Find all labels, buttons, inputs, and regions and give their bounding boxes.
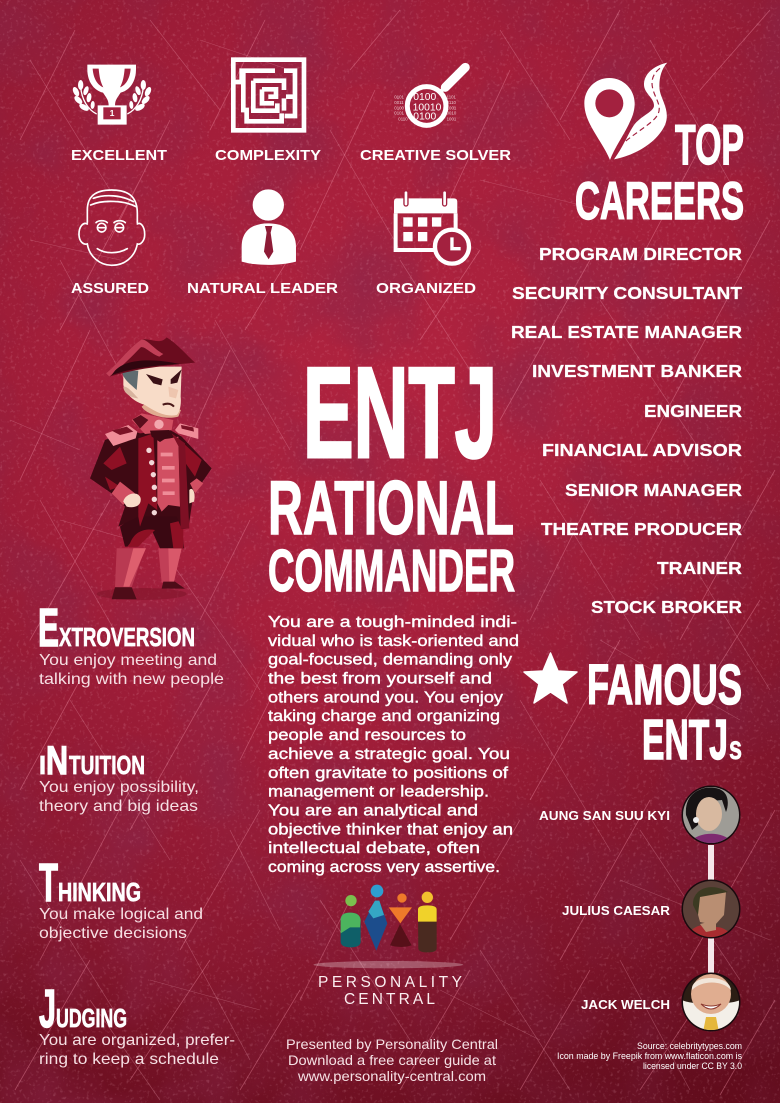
trait: judging: ring to keep a schedule <box>39 1051 219 1068</box>
careers list: PROGRAM DIRECTOR <box>539 244 742 264</box>
portrait: Julius Caesar <box>682 880 740 940</box>
icon: star <box>524 653 577 703</box>
portrait: Jack Welch <box>682 972 740 1032</box>
description paragraph: people and resources to <box>268 727 466 744</box>
icon: magnifier over binary code: 0100 <box>394 105 405 110</box>
logo wordmark <box>318 974 462 1008</box>
icon: magnifier over binary code: 0100 <box>413 111 437 122</box>
label: creative solver: CREATIVE SOLVER <box>360 147 511 164</box>
presented by credits: www.personality-central.com <box>297 1068 486 1084</box>
trait: extroversion <box>38 598 224 688</box>
trait: intuition <box>39 739 199 815</box>
icon: calendar with clock <box>394 191 469 264</box>
careers list: ENGINEER <box>644 401 742 421</box>
careers list <box>511 244 742 617</box>
description paragraph: achieve a strategic goal. You <box>268 746 510 763</box>
trait: judging: UDGING <box>56 1003 127 1033</box>
heading: famous ENTJs <box>587 653 742 772</box>
label: natural leader: NATURAL LEADER <box>187 280 338 297</box>
trait: intuition: theory and big ideas <box>39 798 198 815</box>
presented by credits: Presented by Personality Central <box>286 1036 498 1052</box>
icon: magnifier over binary code: 1101 <box>447 95 457 100</box>
trait: intuition: You enjoy possibility, <box>39 779 199 796</box>
portrait: Aung San Suu Kyi <box>682 786 740 846</box>
description paragraph <box>268 614 519 876</box>
trait: extroversion: talking with new people <box>39 671 224 688</box>
trait: intuition: I <box>39 750 46 780</box>
description paragraph: goal-focused, demanding only <box>268 652 512 669</box>
icon: magnifier over binary code: 0101 <box>394 111 405 116</box>
logo: Personality Central figures <box>313 885 463 968</box>
presented by credits: Download a free career guide at <box>288 1052 496 1068</box>
logo wordmark: PERSONALITY <box>318 974 462 991</box>
trait: extroversion: E <box>38 598 59 658</box>
source credits: Source: celebritytypes.com <box>637 1041 742 1052</box>
title: ENTJ: ENTJ <box>303 341 497 485</box>
trait: thinking: objective decisions <box>39 925 187 942</box>
careers list: SENIOR MANAGER <box>565 480 742 500</box>
title: commander: COMMANDER <box>268 538 515 604</box>
icon: trophy with laurels <box>71 65 153 125</box>
description paragraph: others around you. You enjoy <box>268 689 503 706</box>
icon: magnifier over binary code: 0110 <box>447 100 457 105</box>
careers list: TRAINER <box>657 558 742 578</box>
icon: magnifier over binary code: 1001 <box>447 117 457 122</box>
source credits: licensed under CC BY 3.0 <box>643 1061 742 1072</box>
careers list: STOCK BROKER <box>591 597 742 617</box>
careers list: THEATRE PRODUCER <box>541 519 742 539</box>
title: rational: RATIONAL <box>268 466 514 551</box>
trait: thinking: T <box>39 853 58 913</box>
trait: extroversion: XTROVERSION <box>59 622 195 652</box>
trait: extroversion: You enjoy meeting and <box>39 652 217 669</box>
source credits: Icon made by Freepik from www.flaticon.com is <box>557 1051 742 1062</box>
trait: thinking: You make logical and <box>39 906 203 923</box>
heading: famous ENTJs: s <box>729 729 742 766</box>
icon: map pin and winding road <box>584 63 667 160</box>
name: Julius Caesar: JULIUS CAESAR <box>562 903 671 918</box>
trait: thinking <box>39 853 203 942</box>
careers list: INVESTMENT BANKER <box>532 361 742 381</box>
label: organized: ORGANIZED <box>376 280 476 297</box>
source credits <box>557 1041 742 1072</box>
presented by credits <box>286 1036 498 1084</box>
icon: magnifier over binary code: 1001 <box>447 105 457 110</box>
icon: assured face <box>79 190 145 265</box>
icon: trophy with laurels: 1 <box>110 108 115 118</box>
description paragraph: the best from yourself and <box>268 670 492 688</box>
description paragraph: coming across very assertive. <box>268 859 500 876</box>
description paragraph: often gravitate to positions of <box>268 765 509 782</box>
icon: magnifier over binary code <box>394 67 465 125</box>
trait: judging <box>39 979 235 1068</box>
icon: maze <box>233 60 304 130</box>
trait: thinking: HINKING <box>58 877 141 907</box>
illustration: commander soldier <box>90 337 212 600</box>
trait: intuition: TUITION <box>69 750 145 780</box>
icon: magnifier over binary code: 0011 <box>394 100 404 105</box>
icon: magnifier over binary code: 0100 <box>413 92 437 103</box>
heading: top careers <box>575 113 744 231</box>
careers list: SECURITY CONSULTANT <box>512 283 742 303</box>
name: Aung San Suu Kyi: AUNG SAN SUU KYI <box>539 808 670 823</box>
trait: intuition: N <box>46 739 68 783</box>
trait: judging: J <box>39 979 56 1039</box>
icon: magnifier over binary code: 0101 <box>394 95 405 100</box>
careers list: REAL ESTATE MANAGER <box>511 322 742 342</box>
description paragraph: You are an analytical and <box>268 802 478 820</box>
description paragraph: management or leadership. <box>268 784 489 801</box>
icon: magnifier over binary code: 0010 <box>447 111 457 116</box>
description paragraph: objective thinker that enjoy an <box>268 821 513 838</box>
icon: magnifier over binary code: 10010 <box>413 103 442 114</box>
trait: judging: You are organized, prefer- <box>39 1032 235 1049</box>
description paragraph: vidual who is task-oriented and <box>268 633 519 650</box>
logo wordmark: CENTRAL <box>344 991 435 1008</box>
label: assured: ASSURED <box>71 280 149 297</box>
label: excellent: EXCELLENT <box>71 147 167 164</box>
label: complexity: COMPLEXITY <box>215 147 321 164</box>
description paragraph: intellectual debate, often <box>268 840 480 857</box>
icon: magnifier over binary code: 0110 <box>398 117 408 122</box>
description paragraph: You are a tough-minded indi- <box>268 614 517 631</box>
name: Jack Welch: JACK WELCH <box>581 997 670 1012</box>
connector line between portraits <box>708 845 714 975</box>
careers list: FINANCIAL ADVISOR <box>542 440 742 460</box>
icon: natural leader <box>242 189 296 265</box>
description paragraph: taking charge and organizing <box>268 708 500 725</box>
